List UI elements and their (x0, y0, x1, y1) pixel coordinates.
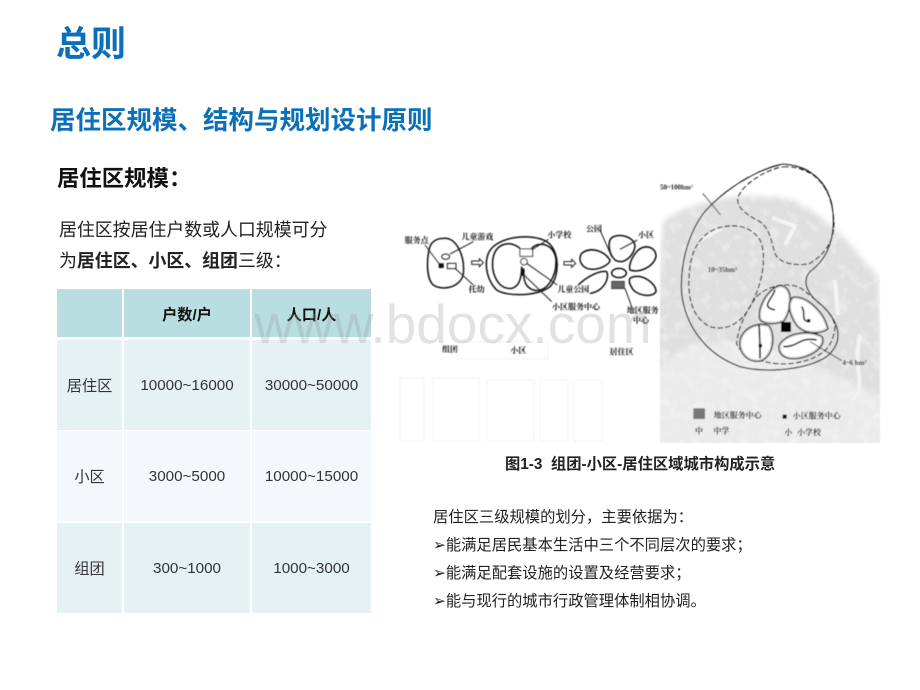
table: scale of residential areas: 30000~50000 (265, 376, 358, 394)
map legend: 小 (784, 428, 793, 437)
title: 总则 (56, 25, 126, 64)
cluster schematic: 儿童游戏 (461, 231, 493, 241)
cluster schematic: 托幼 (469, 284, 485, 294)
watermark: www.bdocx.com (254, 293, 652, 355)
schematic: urban district land plan: 50~100hm² (660, 184, 693, 192)
bullet list: basis for the three-level division: ➢能满足配套设施的设置及经营要求； (433, 565, 691, 582)
map legend: 小区服务中心 (793, 411, 842, 421)
intro text: 为居住区、小区、组团三级： (59, 251, 292, 271)
schematic: urban district land plan: 4~6 hm² (842, 359, 867, 367)
schematic: cluster to neighborhood to district (405, 224, 659, 357)
intro text: 居住区按居住户数或人口规模可分 (59, 220, 327, 240)
table header: population (252, 291, 371, 337)
schematic: urban district land plan (660, 164, 867, 437)
bullet list: basis for the three-level division: 居住区三级规模的划分，主要依据为： (433, 509, 693, 526)
neighborhood schematic: 小区 (510, 345, 526, 355)
neighborhood schematic: 小学校 (547, 230, 572, 240)
row label: residential district (57, 340, 122, 430)
diagram: cluster, neighborhood and district structure (404, 162, 880, 443)
bullet list: basis for the three-level division: ➢能与现行的城市行政管理体制相协调。 (433, 593, 706, 610)
district schematic (578, 224, 659, 357)
cluster schematic (405, 231, 493, 354)
table: scale of residential areas: 3000~5000 (149, 468, 225, 484)
map legend: 中学 (713, 425, 729, 435)
table: scale of residential areas: 300~1000 (153, 560, 221, 576)
table: scale of residential areas: 10000~16000 (140, 376, 234, 394)
map legend: 地区服务中心 (714, 410, 763, 420)
district schematic: 小区 (638, 230, 654, 240)
row label: cluster: 组团 (74, 561, 105, 578)
cluster schematic: 服务点 (405, 235, 430, 245)
section heading: 居住区规模： (57, 166, 191, 191)
cluster schematic: 组团 (442, 344, 458, 354)
intro text (59, 220, 327, 271)
table: scale of residential areas: 1000~3000 (273, 560, 350, 576)
map legend: 小学校 (797, 427, 822, 437)
bullet list: basis for the three-level division (433, 508, 752, 610)
district schematic: 地区服务 (627, 305, 659, 315)
arrow (472, 259, 483, 267)
neighborhood petals (741, 287, 827, 360)
table: scale of residential areas (57, 289, 371, 613)
bullet list: basis for the three-level division: ➢能满足居民基本生活中三个不同层次的要求； (433, 537, 752, 554)
table: scale of residential areas: 10000~15000 (265, 468, 358, 484)
scanned background (456, 162, 880, 443)
arrow (564, 259, 576, 267)
map legend (693, 408, 842, 437)
table header: population: 人口/人 (287, 307, 336, 324)
neighborhood schematic: 小区服务中心 (552, 302, 601, 312)
neighborhood schematic (486, 230, 601, 355)
table header: households (124, 291, 250, 337)
row label: cluster (57, 523, 122, 613)
subtitle: 居住区规模、结构与规划设计原则 (50, 107, 433, 135)
schematic: urban district land plan: 10~35hm² (708, 266, 737, 274)
district schematic: 公园 (586, 224, 602, 233)
row label: residential district: 居住区 (67, 378, 112, 395)
district schematic: 居住区 (610, 347, 634, 357)
neighborhood schematic: 儿童公园 (557, 284, 589, 294)
district schematic: 中心 (633, 315, 650, 325)
figure caption: 图1-3 组团-小区-居住区域城市构成示意 (505, 456, 775, 473)
row label: neighborhood (57, 431, 122, 521)
row label: neighborhood: 小区 (74, 469, 105, 486)
map legend: 中 (695, 425, 703, 435)
table header: households: 户数/户 (162, 307, 212, 324)
